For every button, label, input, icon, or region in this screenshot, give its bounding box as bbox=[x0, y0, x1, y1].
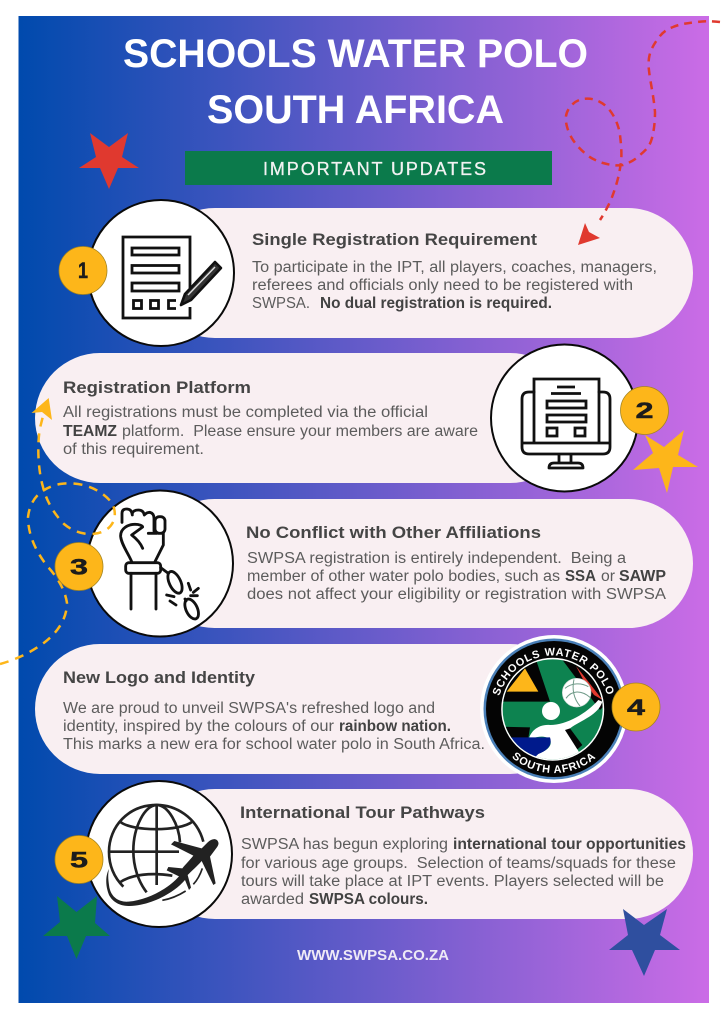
text block: card 5 body: SWPSA has begun exploring bbox=[241, 836, 448, 853]
text block: card 4 body: We are proud to unveil SWPSA's refreshed logo and bbox=[63, 700, 435, 717]
text block: card 1 body: To participate in the IPT, all players, coaches, managers, bbox=[252, 259, 657, 276]
icon: green star bbox=[43, 896, 110, 959]
badge 5: 5 bbox=[70, 848, 88, 872]
text block: card 4 body: rainbow nation. bbox=[339, 718, 451, 735]
text block: card 5 body: awarded bbox=[241, 891, 304, 908]
title: SCHOOLS WATER POLO bbox=[123, 32, 588, 76]
text block: card 3 body: SSA bbox=[565, 568, 596, 585]
text block: card 3 body bbox=[247, 550, 667, 603]
text block: card 2 body: TEAMZ bbox=[63, 423, 118, 440]
logo ring text bbox=[492, 648, 614, 774]
title: SOUTH AFRICA bbox=[207, 88, 504, 132]
text block: card 1 body: No dual registration is required. bbox=[320, 295, 552, 312]
badge 4: 4 bbox=[627, 695, 646, 720]
icon: yellow star bbox=[633, 430, 698, 493]
text block: card 5 body bbox=[241, 836, 686, 908]
arrow: yellow dashed path bbox=[0, 398, 115, 664]
badge 3: 3 bbox=[70, 554, 88, 580]
panel: card 4 bbox=[35, 644, 575, 774]
icon: circle 2 computer bbox=[491, 344, 638, 492]
arrow: red dashed path bbox=[566, 21, 720, 245]
icon: circle 3 broken chain fist bbox=[87, 490, 233, 636]
badge 4 bbox=[612, 683, 660, 731]
text block: card 1 body: referees and officials only need to be registered with bbox=[252, 277, 633, 294]
badge 5 bbox=[55, 836, 103, 884]
icon: swpsa logo bbox=[480, 635, 626, 783]
text block: card 3 body: or bbox=[601, 568, 615, 585]
banner: important updates bbox=[185, 151, 552, 185]
icon: red star bbox=[79, 133, 139, 189]
heading: no conflict: No Conflict with Other Affiliations bbox=[246, 523, 541, 542]
text block: card 1 body bbox=[252, 259, 657, 312]
text block: card 4 body: This marks a new era for school water polo in South Africa. bbox=[63, 736, 485, 753]
text block: card 5 body: tours will take place at IPT events. Players selected will be bbox=[241, 873, 664, 890]
text block: card 2 body bbox=[63, 404, 478, 458]
panel: card 2 bbox=[35, 353, 575, 483]
footer website: WWW.SWPSA.CO.ZA bbox=[297, 947, 449, 964]
logo ring text: SCHOOLS WATER POLO bbox=[492, 648, 614, 696]
heading: international tour: International Tour Pathways bbox=[240, 803, 485, 822]
panel: card 1 bbox=[150, 208, 693, 338]
text block: card 5 body: for various age groups. Selection of teams/squads for these bbox=[241, 855, 676, 872]
badge 1: 1 bbox=[78, 258, 88, 283]
icon: circle 1 document bbox=[88, 200, 234, 346]
text block: card 5 body: SWPSA colours. bbox=[309, 891, 428, 908]
text block: card 3 body: SWPSA registration is entirely independent. Being a bbox=[247, 550, 626, 567]
logo artwork bbox=[502, 659, 603, 760]
text block: card 1 body: SWPSA. bbox=[252, 295, 310, 312]
icon: blue star bbox=[609, 909, 680, 976]
text block: card 5 body: international tour opportunities bbox=[453, 836, 686, 853]
logo ring text: SOUTH AFRICA bbox=[512, 752, 596, 774]
text block: card 3 body: SAWP bbox=[619, 568, 666, 585]
badge 2 bbox=[620, 386, 668, 434]
text block: card 3 body: member of other water polo bodies, such as bbox=[247, 568, 560, 585]
text block: card 3 body: does not affect your eligibility or registration with SWPSA bbox=[247, 586, 667, 603]
badge 3 bbox=[55, 542, 103, 590]
heading: registration platform: Registration Platform bbox=[63, 378, 251, 397]
badge 2: 2 bbox=[636, 398, 654, 423]
text block: card 2 body: platform. Please ensure your members are aware bbox=[122, 423, 478, 440]
badge 1 bbox=[59, 246, 107, 294]
icon: circle 5 globe and plane bbox=[86, 781, 232, 927]
text block: card 4 body: identity, inspired by the colours of our bbox=[63, 718, 334, 735]
heading: new logo: New Logo and Identity bbox=[63, 668, 256, 687]
panel: card 3 bbox=[150, 499, 693, 628]
text block: card 2 body: of this requirement. bbox=[63, 441, 204, 458]
title bbox=[123, 32, 588, 132]
banner: important updates: IMPORTANT UPDATES bbox=[263, 159, 486, 179]
text block: card 4 body bbox=[63, 700, 485, 753]
heading: single registration: Single Registration Requirement bbox=[252, 230, 537, 249]
panel: card 5 bbox=[150, 789, 693, 919]
text block: card 2 body: All registrations must be completed via the official bbox=[63, 404, 428, 421]
